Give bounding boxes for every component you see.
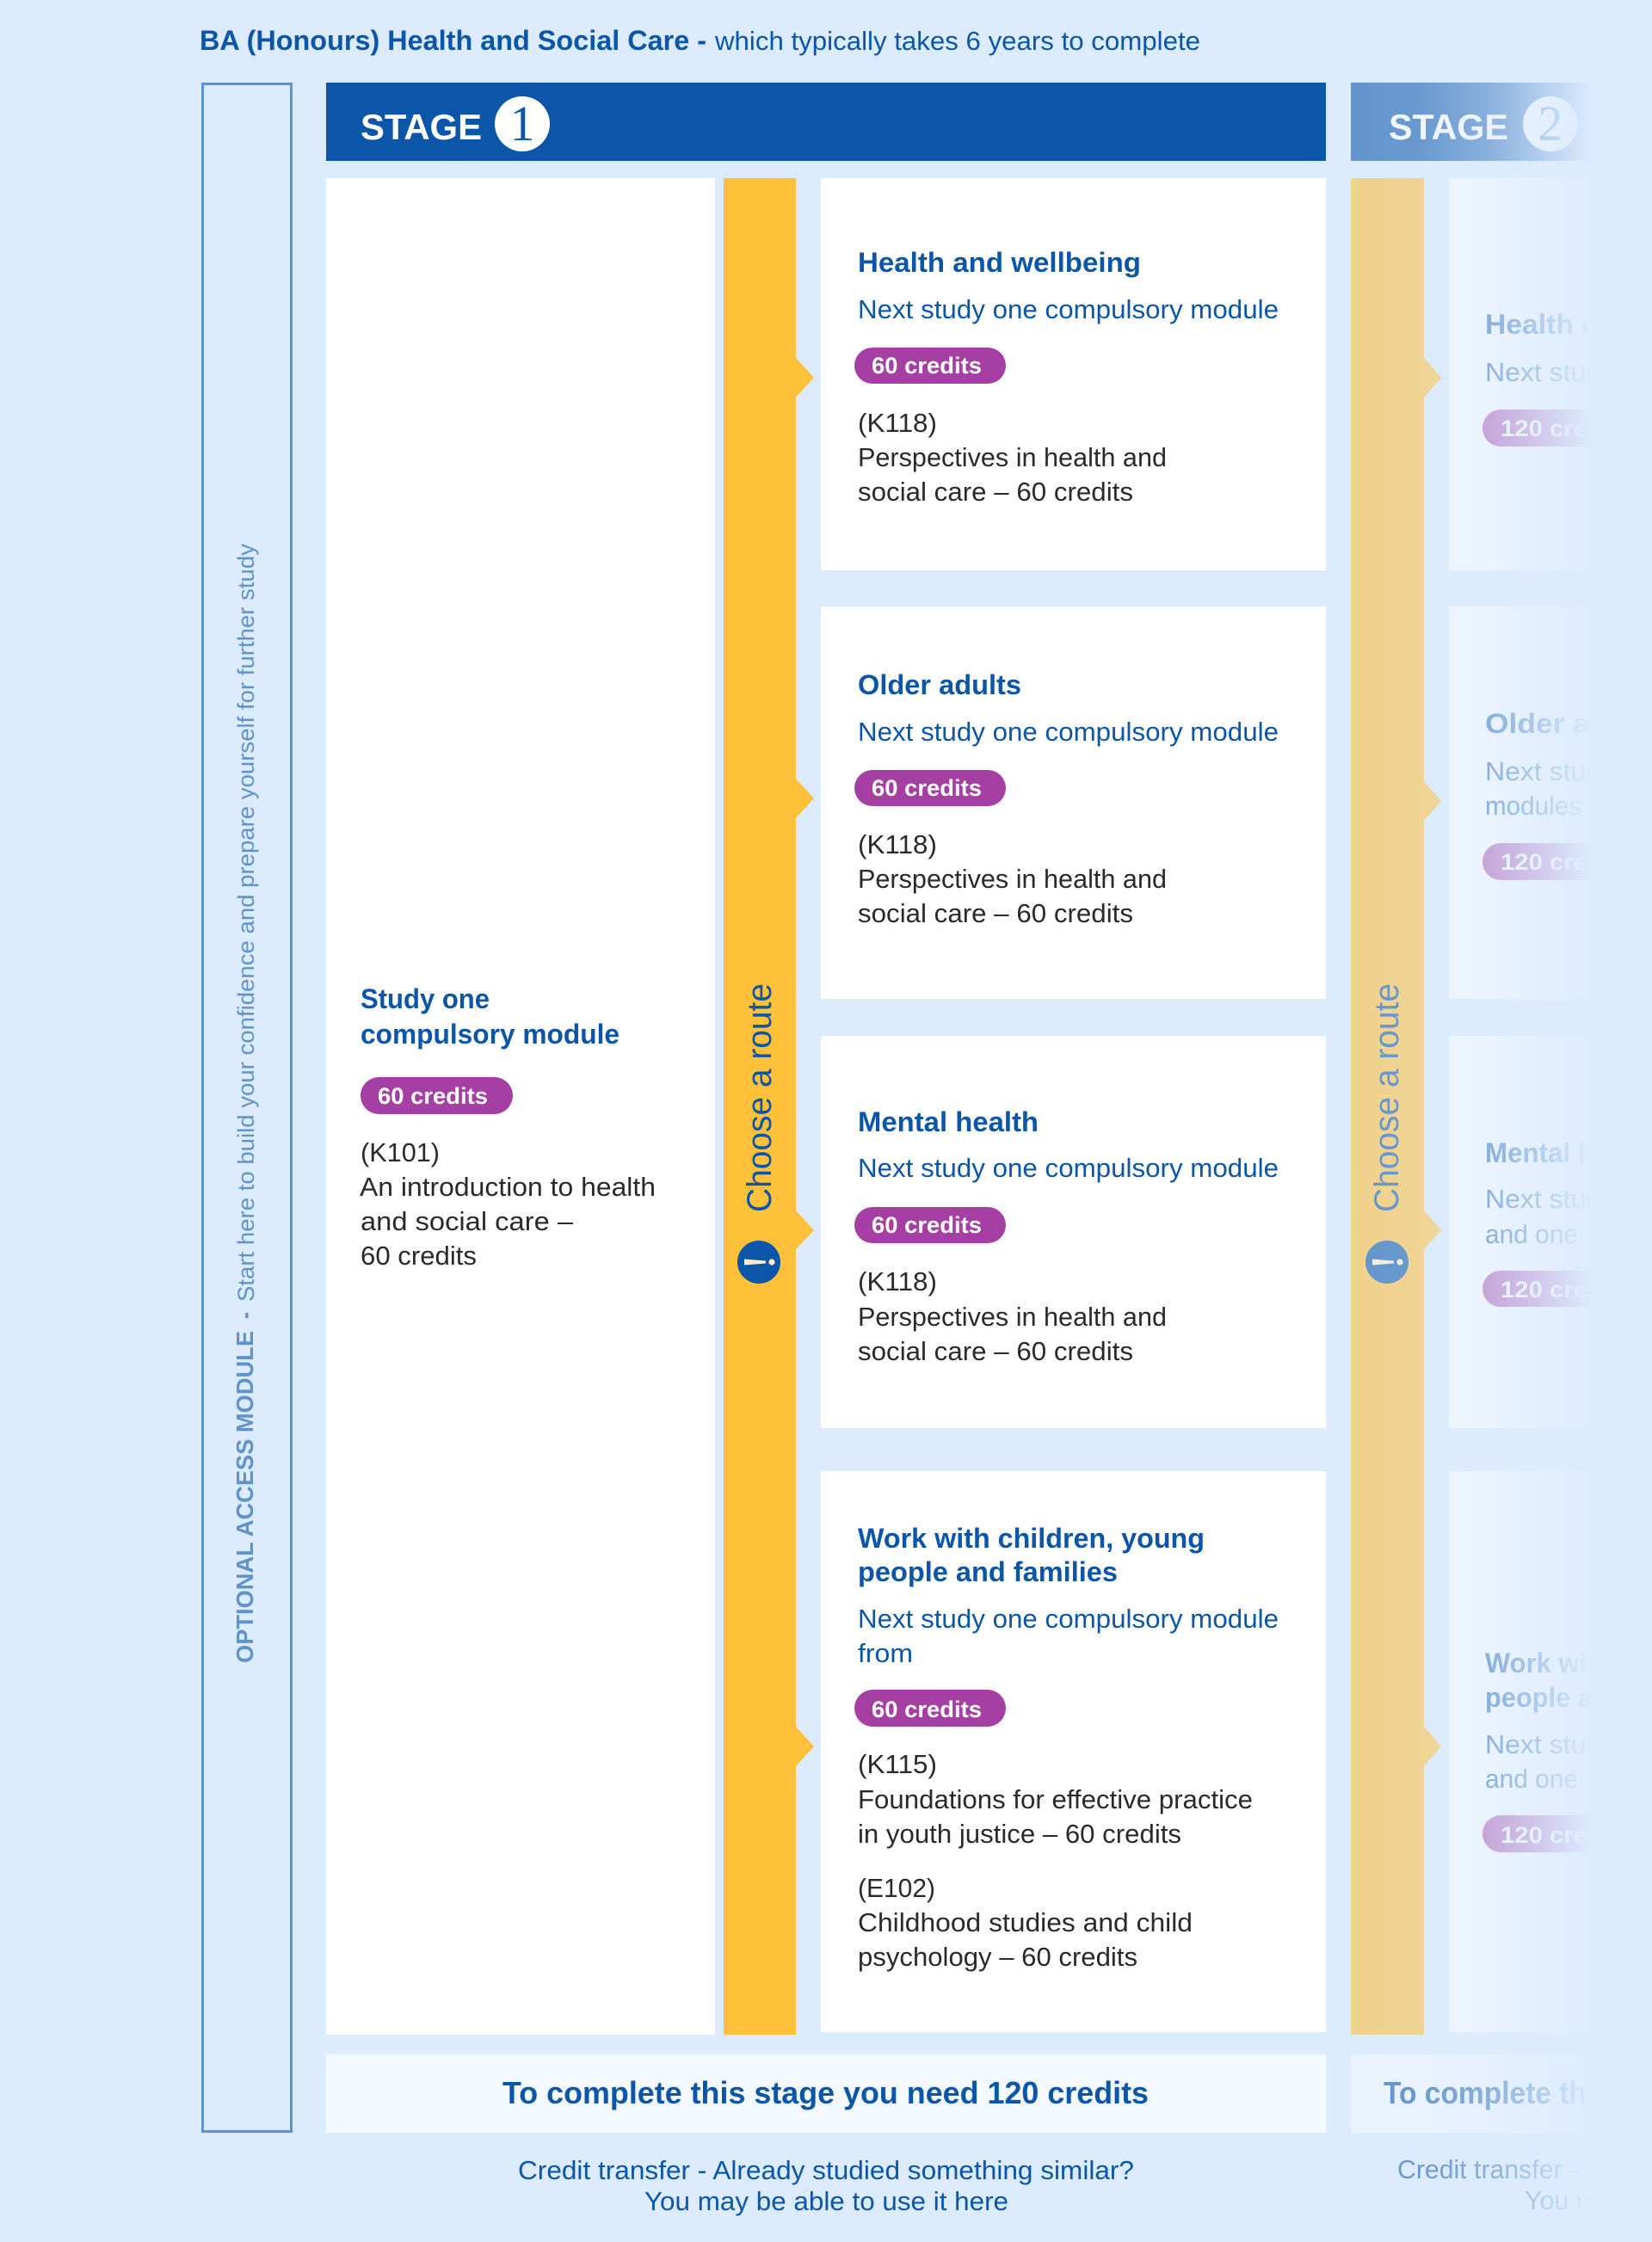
panel: stage 2 route 4: Next stud	[1485, 1729, 1601, 1759]
stage 2 completion bar: To complete th	[1384, 2075, 1587, 2110]
title: which typically takes 6 years to complete	[714, 26, 1200, 56]
panel: stage 1 compulsory module: compulsory module	[361, 1019, 620, 1050]
panel: mental health: Mental health	[858, 1106, 1039, 1137]
panel: work with children, young people and families: Childhood studies and child	[858, 1907, 1193, 1937]
credit transfer note stage 2: Credit transfer -	[1397, 2154, 1578, 2184]
panel: stage 2 route 3: Next stud	[1485, 1184, 1601, 1214]
panel: health and wellbeing: 60 credits	[872, 353, 982, 379]
panel: health and wellbeing: Health and wellbeing	[858, 247, 1141, 278]
panel: stage 2 route 3: 120 cre	[1501, 1277, 1587, 1303]
panel: stage 2 route 4: Work wi	[1485, 1648, 1587, 1678]
credit transfer note stage 1: Credit transfer - Already studied something similar?	[518, 2155, 1134, 2185]
panel: older adults: 60 credits	[872, 775, 982, 801]
panel: work with children, young people and families: Next study one compulsory module	[858, 1604, 1279, 1634]
title: BA (Honours) Health and Social Care -	[200, 25, 706, 56]
stage 2 header	[1351, 83, 1652, 161]
panel: stage 2 route 3: Mental h	[1485, 1137, 1594, 1168]
panel: stage 2 route 1: Health c	[1485, 309, 1598, 340]
panel: stage 2 route 3	[1449, 1036, 1652, 1428]
panel: stage 1 compulsory module: An introduction to health	[360, 1172, 656, 1202]
panel: health and wellbeing: (K118)	[858, 408, 937, 438]
panel: stage 2 route 1: Next stud	[1485, 357, 1601, 387]
panel: stage 2 route 3: and one	[1485, 1219, 1578, 1249]
stage 1 header	[326, 83, 1326, 161]
panel: stage 2 route 4	[1449, 1471, 1652, 2032]
panel: stage 2 route 4: and one	[1485, 1764, 1578, 1794]
credit transfer note stage 1: You may be able to use it here	[644, 2186, 1008, 2216]
panel: work with children, young people and families: in youth justice – 60 credits	[858, 1819, 1181, 1849]
credit transfer note stage 1	[518, 2155, 1134, 2216]
panel: stage 2 route 2: Next stud	[1485, 756, 1601, 786]
panel: health and wellbeing: Perspectives in health and	[858, 442, 1167, 472]
panel: health and wellbeing	[821, 178, 1326, 570]
panel: optional access module	[203, 84, 291, 2132]
panel: mental health: (K118)	[858, 1266, 937, 1297]
title	[200, 25, 1200, 56]
panel: optional access module: OPTIONAL ACCESS MODULE	[231, 1331, 258, 1663]
panel: stage 2 route 2: Older a	[1485, 708, 1590, 739]
panel: older adults: Older adults	[858, 669, 1021, 700]
stage 1 header: 1	[509, 95, 535, 151]
panel: work with children, young people and families: Foundations for effective practice	[858, 1784, 1253, 1814]
stage 1 completion bar: To complete this stage you need 120 credits	[502, 2075, 1149, 2110]
credit transfer note stage 2	[1397, 2154, 1598, 2215]
panel: work with children, young people and families: 60 credits	[872, 1697, 982, 1722]
panel: work with children, young people and families: from	[858, 1638, 913, 1668]
panel: older adults: Perspectives in health and	[858, 864, 1167, 894]
panel: older adults: (K118)	[858, 829, 937, 859]
panel: mental health: 60 credits	[872, 1212, 982, 1238]
panel: mental health: social care – 60 credits	[858, 1336, 1133, 1366]
panel: mental health	[821, 1036, 1326, 1428]
panel: older adults: Next study one compulsory module	[858, 717, 1279, 747]
panel: stage 1 compulsory module: 60 credits	[378, 1083, 488, 1109]
panel: stage 2 route 2: 120 cre	[1501, 849, 1587, 875]
panel: older adults: social care – 60 credits	[858, 898, 1133, 928]
choose a route bar stage 2: Choose a route	[1368, 983, 1406, 1212]
panel: stage 1 compulsory module: (K101)	[361, 1137, 440, 1167]
panel: stage 2 route 1	[1449, 178, 1652, 570]
panel: older adults	[821, 607, 1326, 999]
stage 2 completion bar	[1351, 2054, 1652, 2133]
panel: stage 1 compulsory module: Study one	[361, 983, 490, 1014]
stage 2 header: STAGE	[1389, 107, 1508, 147]
panel: stage 2 route 4: 120 cre	[1501, 1822, 1587, 1848]
stage 1 header: STAGE	[361, 107, 482, 147]
panel: health and wellbeing: social care – 60 credits	[858, 477, 1133, 507]
panel: health and wellbeing: Next study one compulsory module	[858, 294, 1279, 324]
choose a route bar stage 1	[724, 178, 814, 2035]
panel: work with children, young people and families: psychology – 60 credits	[858, 1942, 1137, 1972]
choose a route bar stage 2	[1351, 178, 1441, 2035]
panel: optional access module: Start here to build your confidence and prepare yourself for further study	[233, 544, 259, 1302]
panel: work with children, young people and families	[821, 1471, 1326, 2032]
panel: work with children, young people and families: Work with children, young	[858, 1523, 1205, 1554]
panel: optional access module: -	[231, 1312, 258, 1319]
panel: stage 2 route 2: modules	[1485, 791, 1581, 821]
panel: mental health: Perspectives in health and	[858, 1302, 1167, 1332]
panel: work with children, young people and families: (K115)	[858, 1749, 937, 1779]
panel: stage 1 compulsory module: 60 credits	[361, 1241, 477, 1271]
panel: work with children, young people and families: (E102)	[858, 1873, 935, 1903]
panel: stage 1 compulsory module	[326, 178, 715, 2035]
panel: mental health: Next study one compulsory module	[858, 1153, 1279, 1183]
panel: stage 2 route 4: people a	[1485, 1682, 1593, 1713]
panel: stage 2 route 1: 120 cre	[1501, 416, 1587, 441]
panel: stage 1 compulsory module: and social care –	[361, 1206, 574, 1236]
panel: stage 2 route 2	[1449, 607, 1652, 999]
stage 1 completion bar	[326, 2054, 1326, 2133]
panel: work with children, young people and families: people and families	[858, 1556, 1118, 1587]
stage 2 header: 2	[1538, 95, 1563, 151]
credit transfer note stage 2: You m	[1525, 2185, 1598, 2215]
choose a route bar stage 1: Choose a route	[741, 983, 779, 1212]
stage 2 faded column	[1347, 77, 1652, 2242]
